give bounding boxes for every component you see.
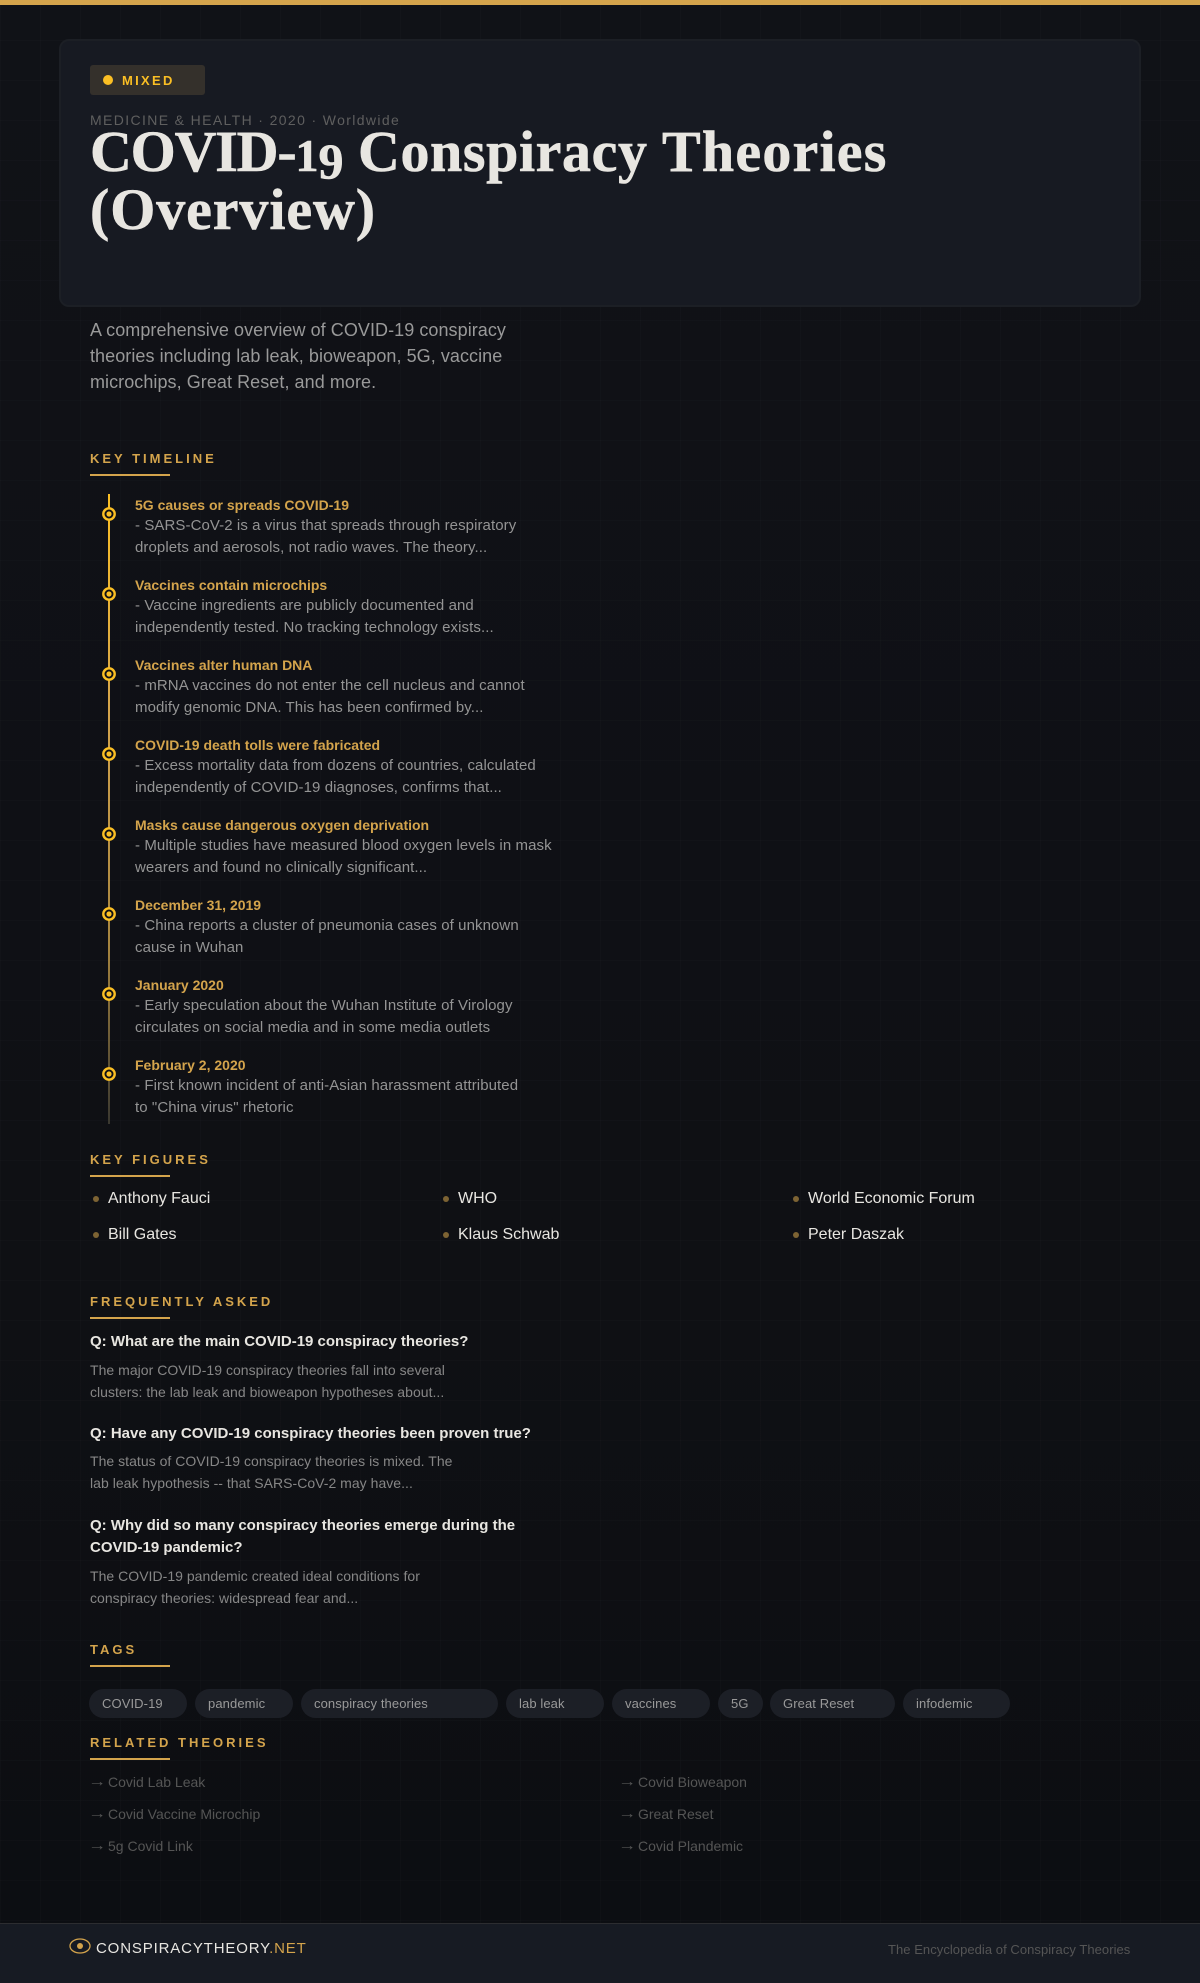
question 3: COVID-19 pandemic?: [90, 1539, 243, 1556]
event title 6: December 31, 2019: [135, 897, 261, 913]
marker 1: [102, 507, 116, 521]
figure: Anthony Fauci: Anthony Fauci: [108, 1190, 210, 1207]
brand wordmark: CONSPIRACYTHEORY.NET: [96, 1940, 307, 1957]
figure: Peter Daszak: Peter Daszak: [808, 1226, 904, 1243]
related link: Great Reset: Great Reset: [638, 1806, 713, 1822]
heading: key timeline: KEY TIMELINE: [90, 451, 217, 466]
event text 2: - Vaccine ingredients are publicly documented and: [135, 597, 474, 614]
answer 3: conspiracy theories: widespread fear and...: [90, 1590, 358, 1606]
footer tagline: The Encyclopedia of Conspiracy Theories: [888, 1942, 1130, 1957]
tag: Great Reset: Great Reset: [783, 1696, 854, 1711]
tag: COVID-19: COVID-19: [102, 1696, 163, 1711]
related link: Covid Vaccine Microchip: Covid Vaccine Microchip: [108, 1806, 260, 1822]
answer 1: clusters: the lab leak and bioweapon hypotheses about...: [90, 1384, 444, 1400]
event text 5: wearers and found no clinically significant...: [135, 859, 427, 876]
related link: Covid Plandemic: →: [618, 1837, 636, 1853]
tag: 5G: 5G: [731, 1696, 749, 1711]
event text 4: - Excess mortality data from dozens of countries, calculated: [135, 757, 536, 774]
event text 7: [135, 997, 513, 1036]
panel: header card: [59, 39, 1141, 307]
answer 2: lab leak hypothesis -- that SARS-CoV-2 may have...: [90, 1475, 413, 1491]
tag: COVID-19: [89, 1689, 187, 1718]
event text 8: to "China virus" rhetoric: [135, 1099, 294, 1116]
event text 7: - Early speculation about the Wuhan Institute of Virology: [135, 997, 513, 1014]
related link: Covid Lab Leak: →: [88, 1773, 106, 1789]
related link: 5g Covid Link: 5g Covid Link: [108, 1838, 193, 1854]
event text 7: circulates on social media and in some media outlets: [135, 1019, 490, 1036]
answer 2: [90, 1453, 452, 1491]
tag: lab leak: [506, 1689, 604, 1718]
marker 8: [102, 1067, 116, 1081]
answer 1: The major COVID-19 conspiracy theories fall into several: [90, 1362, 445, 1378]
icon: status dot: [103, 75, 113, 85]
answer 1: [90, 1362, 445, 1400]
description: A comprehensive overview of COVID-19 conspiracy: [90, 320, 506, 340]
figure: Bill Gates: Bill Gates: [108, 1226, 176, 1243]
event text 6: - China reports a cluster of pneumonia cases of unknown: [135, 917, 519, 934]
related link: Covid Bioweapon: Covid Bioweapon: [638, 1774, 747, 1790]
category line: MEDICINE & HEALTH · 2020 · Worldwide: [90, 112, 400, 128]
tag: vaccines: [612, 1689, 710, 1718]
badge: mixed: [90, 65, 205, 95]
tag: conspiracy theories: conspiracy theories: [314, 1696, 428, 1711]
question 3: [90, 1517, 515, 1556]
figure: Klaus Schwab: Klaus Schwab: [458, 1226, 559, 1243]
timeline spine: [108, 494, 110, 1124]
heading: tags: TAGS: [90, 1642, 137, 1657]
related link: Covid Plandemic: Covid Plandemic: [638, 1838, 743, 1854]
event title 5: Masks cause dangerous oxygen deprivation: [135, 817, 429, 833]
answer 2: The status of COVID-19 conspiracy theories is mixed. The: [90, 1453, 452, 1469]
event text 4: [135, 757, 536, 796]
marker 7: [102, 987, 116, 1001]
title: [90, 119, 888, 242]
event text 6: cause in Wuhan: [135, 939, 243, 956]
event title 4: COVID-19 death tolls were fabricated: [135, 737, 380, 753]
related link: Covid Lab Leak: Covid Lab Leak: [108, 1774, 205, 1790]
event text 1: droplets and aerosols, not radio waves. The theory...: [135, 539, 487, 556]
question 2: Q: Have any COVID-19 conspiracy theories been proven true?: [90, 1425, 531, 1442]
heading: frequently asked: FREQUENTLY ASKED: [90, 1294, 273, 1309]
related link: Covid Bioweapon: →: [618, 1773, 636, 1789]
event text 6: [135, 917, 519, 956]
tag: 5G: [718, 1689, 763, 1718]
figure: World Economic Forum: World Economic Forum: [808, 1190, 975, 1207]
top accent bar: [0, 0, 1200, 5]
tag: pandemic: [195, 1689, 293, 1718]
tag: Great Reset: [770, 1689, 895, 1718]
tag: vaccines: vaccines: [625, 1696, 676, 1711]
answer 3: [90, 1568, 420, 1606]
description: theories including lab leak, bioweapon, 5G, vaccine: [90, 346, 502, 366]
marker 4: [102, 747, 116, 761]
event text 2: independently tested. No tracking technology exists...: [135, 619, 494, 636]
event title 8: February 2, 2020: [135, 1057, 246, 1073]
question 3: Q: Why did so many conspiracy theories emerge during the: [90, 1517, 515, 1534]
event title 1: 5G causes or spreads COVID-19: [135, 497, 349, 513]
event title 3: Vaccines alter human DNA: [135, 657, 312, 673]
marker 2: [102, 587, 116, 601]
description: [90, 320, 506, 392]
event text 8: [135, 1077, 518, 1116]
heading: key figures: KEY FIGURES: [90, 1152, 211, 1167]
answer 3: The COVID-19 pandemic created ideal conditions for: [90, 1568, 420, 1584]
event text 5: - Multiple studies have measured blood oxygen levels in mask: [135, 837, 552, 854]
related link: Great Reset: →: [618, 1805, 636, 1821]
event text 3: modify genomic DNA. This has been confirmed by...: [135, 699, 484, 716]
marker 6: [102, 907, 116, 921]
badge label: MIXED: [122, 73, 175, 88]
title: (Overview): [90, 177, 376, 242]
tag: lab leak: lab leak: [519, 1696, 565, 1711]
related link: Covid Vaccine Microchip: →: [88, 1805, 106, 1821]
tag: conspiracy theories: [301, 1689, 498, 1718]
tag: pandemic: pandemic: [208, 1696, 265, 1711]
marker 5: [102, 827, 116, 841]
question 1: Q: What are the main COVID-19 conspiracy theories?: [90, 1333, 468, 1350]
event text 5: [135, 837, 552, 876]
tag: infodemic: infodemic: [916, 1696, 973, 1711]
event text 3: [135, 677, 525, 716]
event text 1: - SARS-CoV-2 is a virus that spreads through respiratory: [135, 517, 516, 534]
event text 1: [135, 517, 516, 556]
description: microchips, Great Reset, and more.: [90, 372, 376, 392]
title: COVID-19 Conspiracy Theories: [90, 119, 888, 189]
tag: infodemic: [903, 1689, 1010, 1718]
event title 7: January 2020: [135, 977, 224, 993]
figure: WHO: WHO: [458, 1190, 497, 1207]
heading: related theories: RELATED THEORIES: [90, 1735, 268, 1750]
event text 4: independently of COVID-19 diagnoses, confirms that...: [135, 779, 502, 796]
footer: [0, 1923, 1200, 1983]
event text 8: - First known incident of anti-Asian harassment attributed: [135, 1077, 518, 1094]
related link: 5g Covid Link: →: [88, 1837, 106, 1853]
icon: eye: [69, 1938, 91, 1954]
event text 3: - mRNA vaccines do not enter the cell nucleus and cannot: [135, 677, 525, 694]
event title 2: Vaccines contain microchips: [135, 577, 327, 593]
marker 3: [102, 667, 116, 681]
event text 2: [135, 597, 494, 636]
